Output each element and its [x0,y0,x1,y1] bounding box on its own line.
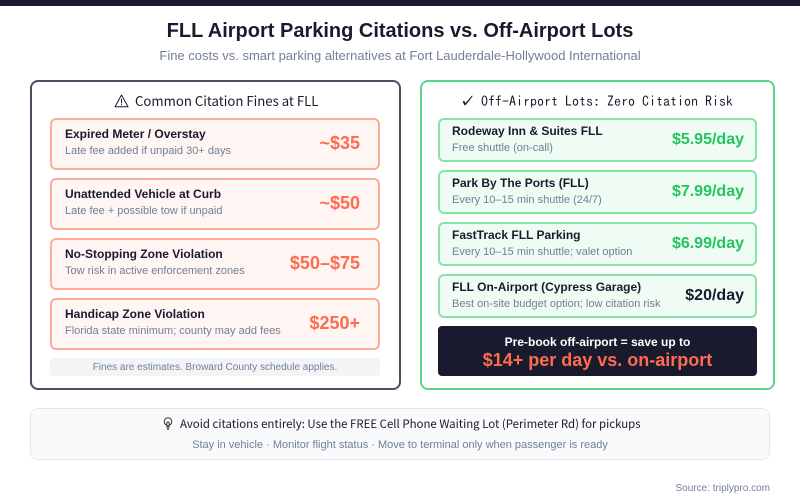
fine amount: ~$50 [319,193,360,213]
lot card: park by the ports [438,170,757,214]
fine card: unattended vehicle [50,178,380,230]
fine amount: ~$35 [319,133,360,153]
lot price: $20/day [685,287,744,304]
lot note: Best on-site budget option; low citation risk [452,298,661,310]
fine note: Florida state minimum; county may add fees [65,325,281,337]
icon: warning triangle [114,94,128,108]
panel: citation fines [30,80,401,390]
lot name: FLL On-Airport (Cypress Garage) [452,280,641,294]
source: Source: triplypro.com [676,483,770,494]
lot note: Free shuttle (on-call) [452,142,553,154]
lot card: rodeway inn [438,118,757,162]
fine name: Unattended Vehicle at Curb [65,187,221,201]
banner text: Pre-book off-airport = save up to [505,335,690,349]
heading: common citation fines: Common Citation Fines at FLL [135,91,318,110]
savings banner [438,326,757,376]
lot name: Park By The Ports (FLL) [452,176,589,190]
fine note: Late fee + possible tow if unpaid [65,205,222,217]
fine name: No-Stopping Zone Violation [65,247,223,261]
lot name: FastTrack FLL Parking [452,228,580,242]
lot price: $6.99/day [672,235,744,252]
tip panel [30,408,770,460]
fine amount: $250+ [309,313,360,333]
disclaimer note [50,358,380,376]
tip text: Avoid citations entirely: Use the FREE Cell Phone Waiting Lot (Perimeter Rd) for pickups [180,416,641,432]
lot price: $5.95/day [672,131,744,148]
title: FLL Airport Parking Citations vs. Off-Airport Lots [167,20,633,42]
heading: off-airport lots: ✓ Off-Airport Lots: Zero Citation Risk [460,94,733,108]
top bar [0,0,800,6]
subtitle: Fine costs vs. smart parking alternatives at Fort Lauderdale-Hollywood International [159,48,641,63]
lot name: Rodeway Inn & Suites FLL [452,124,603,138]
icon: light bulb [164,417,172,430]
tip details: Stay in vehicle · Monitor flight status · Move to terminal only when passenger is ready [192,439,608,451]
fine note: Late fee added if unpaid 30+ days [65,145,231,157]
lot card: fasttrack [438,222,757,266]
fine note: Tow risk in active enforcement zones [65,265,245,277]
banner highlight: $14+ per day vs. on-airport [483,350,712,370]
fine name: Handicap Zone Violation [65,307,205,321]
fine card: expired meter [50,118,380,170]
panel: off-airport lots [420,80,775,390]
fine card: handicap zone [50,298,380,350]
disclaimer note: Fines are estimates. Broward County schedule applies. [93,362,337,373]
lot note: Every 10–15 min shuttle; valet option [452,246,632,258]
lot price: $7.99/day [672,183,744,200]
fine name: Expired Meter / Overstay [65,127,206,141]
fine card: no-stopping zone [50,238,380,290]
lot note: Every 10–15 min shuttle (24/7) [452,194,602,206]
fine amount: $50–$75 [290,253,360,273]
lot card: on-airport cypress garage [438,274,757,318]
